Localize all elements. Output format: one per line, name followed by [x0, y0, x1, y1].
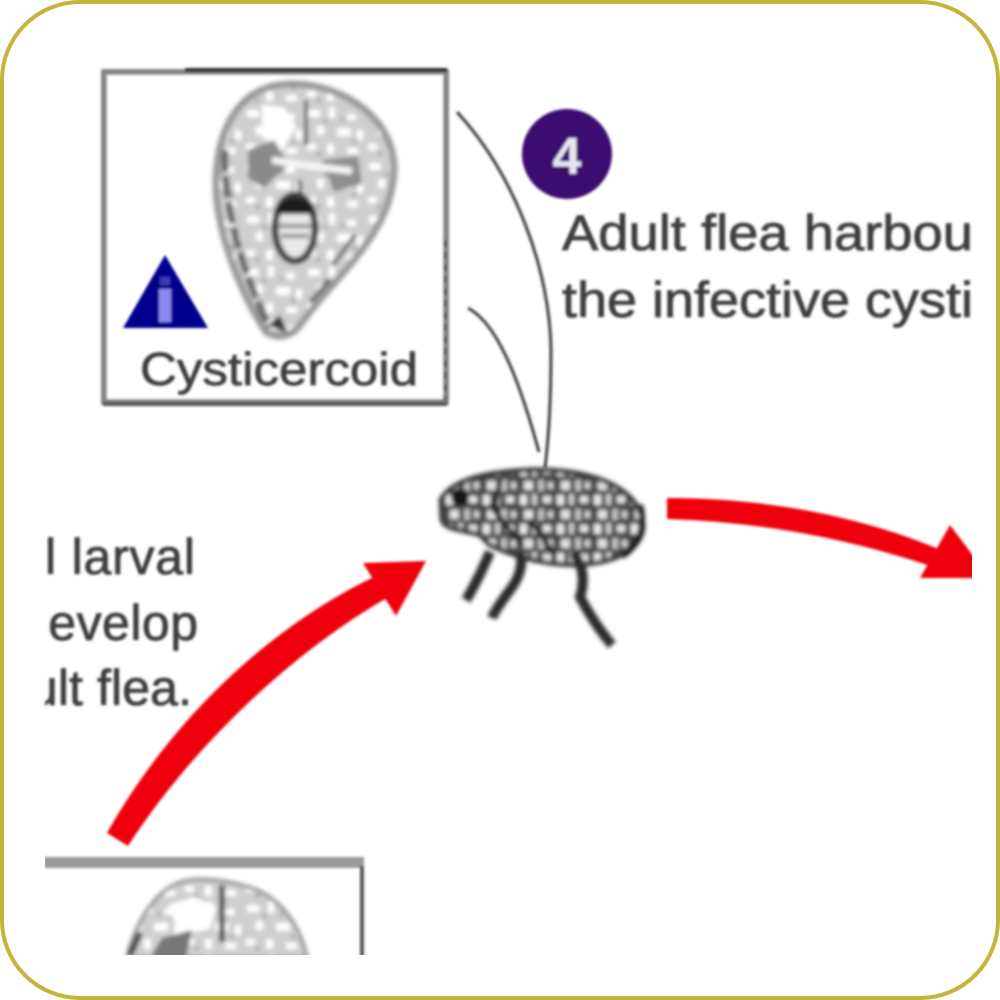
pointer lines from inset to flea [457, 112, 551, 468]
icon: scolex (cropped) [127, 879, 307, 958]
step 4 badge [522, 109, 612, 199]
inset frame [103, 70, 447, 404]
text: step 3 description: dult flea. [2, 660, 192, 716]
icon: cysticercoid larva [216, 84, 394, 336]
text: step 3 description: l larval [45, 529, 195, 585]
label: Cysticercoid: Cysticercoid [140, 343, 418, 395]
step 4 badge: 4 [553, 128, 582, 186]
panel: lower inset (cropped) [44, 857, 364, 958]
text: step 4 description: Adult flea harbou [562, 205, 973, 261]
arrow: red curved arrow from flea [667, 498, 990, 578]
arrow: red curved arrow to flea [107, 561, 426, 846]
panel: cysticercoid inset [103, 70, 447, 404]
text: step 4 description: the infective cysti [562, 272, 973, 328]
text: step 3 description: develop [20, 595, 198, 651]
icon: infective stage triangle [123, 255, 208, 328]
lower inset frame [44, 857, 364, 958]
text: step 4 description [562, 205, 973, 328]
icon: adult flea [441, 470, 643, 645]
text: step 3 description [2, 529, 198, 716]
